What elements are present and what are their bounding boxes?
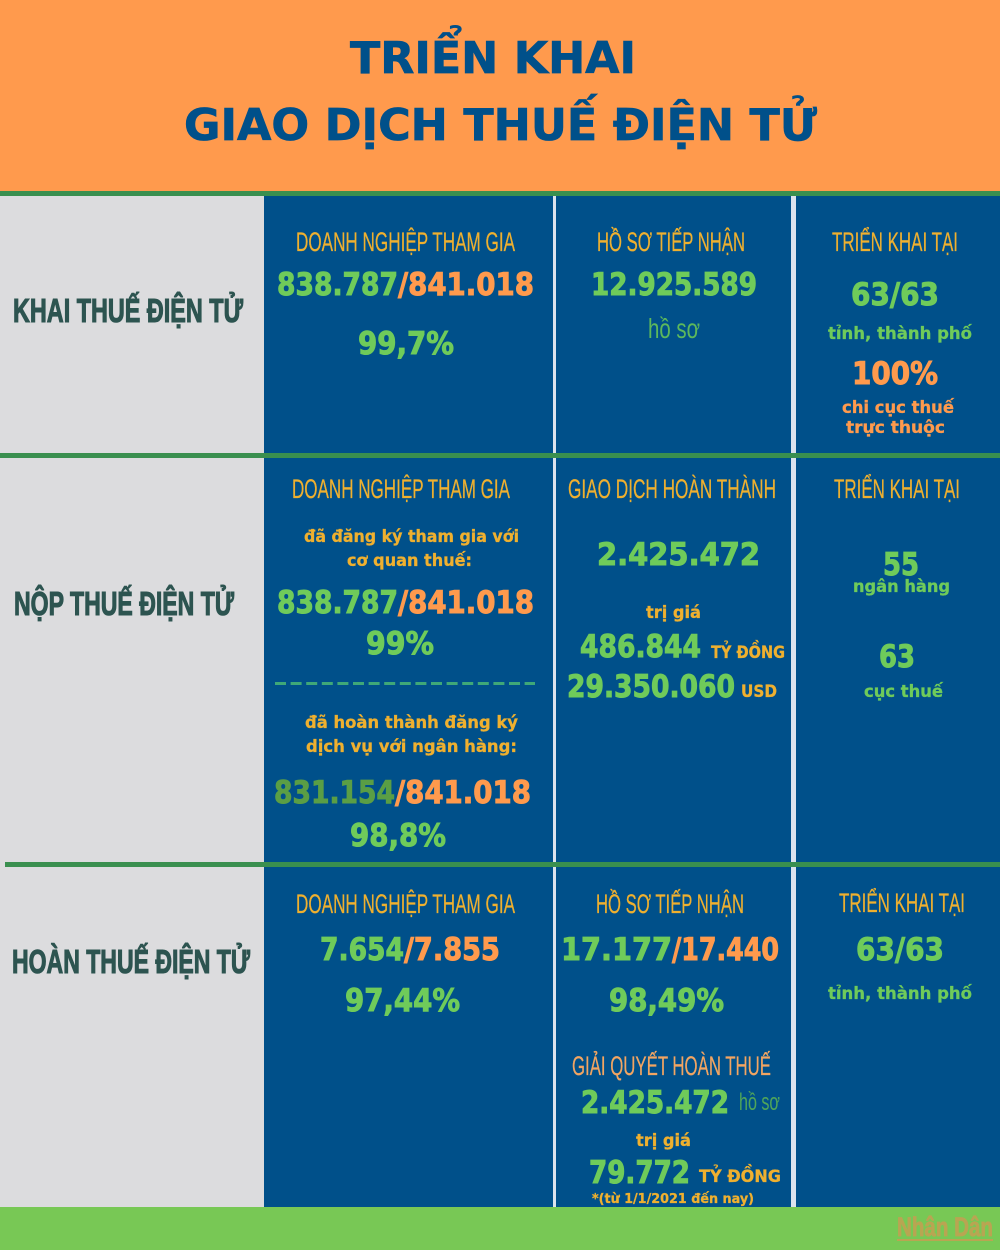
row 2 column 1: doanh nghiệp: dịch vụ với ngân hàng: [306, 737, 517, 757]
row 3 column 2: hồ sơ and giải quyết: 79.772 [589, 1155, 690, 1191]
row 2 column 3: triển khai: 55 [883, 547, 919, 583]
header band [0, 0, 1000, 191]
row 2 column 1: doanh nghiệp: 831.154 [274, 775, 395, 811]
row 1 column 1: doanh nghiệp: /841.018 [398, 267, 534, 303]
row 2 column 2: giao dịch: 2.425.472 [597, 537, 760, 573]
row 2 column 3: triển khai: cục thuế [864, 681, 943, 702]
row 1 column 3: triển khai: trực thuộc [846, 418, 945, 438]
row 2 column 3: triển khai [834, 473, 960, 702]
row 2 column 1: doanh nghiệp: 98,8% [350, 818, 446, 854]
row 2 column 3: triển khai: 63 [879, 639, 915, 675]
row 3 column 3: triển khai [828, 887, 972, 1004]
row 3 column 1: doanh nghiệp: DOANH NGHIỆP THAM GIA [296, 888, 515, 919]
row 2 column 1: doanh nghiệp [274, 473, 535, 854]
row 1 column 2: hồ sơ: 12.925.589 [591, 267, 757, 303]
title: GIAO DỊCH THUẾ ĐIỆN TỬ [184, 93, 817, 151]
row 2 column 1: doanh nghiệp: /841.018 [395, 775, 531, 811]
row 2 column 2: giao dịch: USD [741, 682, 777, 702]
row 2 column 2: giao dịch [567, 474, 785, 705]
row 2 column 1: doanh nghiệp: DOANH NGHIỆP THAM GIA [292, 473, 510, 504]
row 1 column 1: doanh nghiệp: 838.787 [277, 267, 398, 303]
row 3 column 2: hồ sơ and giải quyết [561, 888, 781, 1207]
row 3 column 2: hồ sơ and giải quyết: 17.177 [561, 932, 672, 968]
row 3 column 1: doanh nghiệp: 7.654 [320, 932, 404, 968]
row 3 column 3: triển khai: tỉnh, thành phố [828, 983, 972, 1004]
row label: hoàn thuế: HOÀN THUẾ ĐIỆN TỬ [12, 943, 250, 980]
row 1 column 2: hồ sơ: HỒ SƠ TIẾP NHẬN [597, 226, 745, 257]
row 2 column 2: giao dịch: TỶ ĐỒNG [711, 639, 785, 663]
row 3 column 1: doanh nghiệp: 97,44% [345, 983, 460, 1019]
row 1 column 3: triển khai: 100% [852, 356, 938, 392]
row 3 column 2: hồ sơ and giải quyết: HỒ SƠ TIẾP NHẬN [596, 888, 744, 919]
row label: nộp thuế: NỘP THUẾ ĐIỆN TỬ [14, 584, 234, 622]
row 1 column 3: triển khai [828, 226, 972, 438]
row label: khai thuế: KHAI THUẾ ĐIỆN TỬ [13, 292, 243, 329]
title: TRIỂN KHAI [350, 24, 636, 84]
row 3 column 1: doanh nghiệp [296, 888, 515, 1019]
row 2 column 1: doanh nghiệp: 99% [366, 626, 434, 662]
row 1 column 1: doanh nghiệp: 99,7% [358, 326, 454, 362]
row 1 column 1: doanh nghiệp: DOANH NGHIỆP THAM GIA [296, 226, 515, 257]
row 3 column 2: hồ sơ and giải quyết: hồ sơ [739, 1089, 780, 1116]
row 1 column 3: triển khai: 63/63 [851, 277, 939, 313]
row 2 column 1: doanh nghiệp: đã đăng ký tham gia với [304, 527, 519, 547]
row 3 column 2: hồ sơ and giải quyết: GIẢI QUYẾT HOÀN THUẾ [572, 1049, 771, 1081]
row 2 column 2: giao dịch: trị giá [646, 603, 701, 623]
row 3 column 1: doanh nghiệp: /7.855 [404, 932, 500, 968]
row 2 column 1: doanh nghiệp: cơ quan thuế: [347, 550, 472, 571]
row 3 column 2: hồ sơ and giải quyết: /17.440 [672, 932, 779, 968]
title [184, 24, 817, 151]
row 1 column 3: triển khai: chi cục thuế [842, 397, 954, 418]
row 3 column 2: hồ sơ and giải quyết: *(từ 1/1/2021 đến nay) [592, 1190, 754, 1207]
row 1 column 3: triển khai: tỉnh, thành phố [828, 323, 972, 344]
row 1 column 2: hồ sơ [591, 226, 757, 344]
row 3 column 2: hồ sơ and giải quyết: 2.425.472 [581, 1085, 729, 1121]
row 2 column 1: doanh nghiệp: đã hoàn thành đăng ký [305, 713, 518, 733]
row 1 column 2: hồ sơ: hồ sơ [648, 313, 700, 344]
blue table area [264, 196, 1000, 1208]
row 3 column 2: hồ sơ and giải quyết: trị giá [636, 1131, 691, 1151]
row 2 column 3: triển khai: ngân hàng [853, 577, 950, 597]
footer band [0, 1207, 1000, 1250]
row 3 column 3: triển khai: 63/63 [856, 932, 944, 968]
row 2 column 1: doanh nghiệp: 838.787 [277, 585, 398, 621]
row 2 column 2: giao dịch: GIAO DỊCH HOÀN THÀNH [568, 474, 776, 504]
row 1 column 1: doanh nghiệp [277, 226, 534, 362]
row 3 column 2: hồ sơ and giải quyết: TỶ ĐỒNG [699, 1163, 781, 1187]
row 2 column 1: doanh nghiệp: /841.018 [398, 585, 534, 621]
row 2 column 2: giao dịch: 486.844 [580, 629, 701, 665]
row 3 column 2: hồ sơ and giải quyết: 98,49% [609, 983, 724, 1019]
row 2 column 2: giao dịch: 29.350.060 [567, 669, 735, 705]
